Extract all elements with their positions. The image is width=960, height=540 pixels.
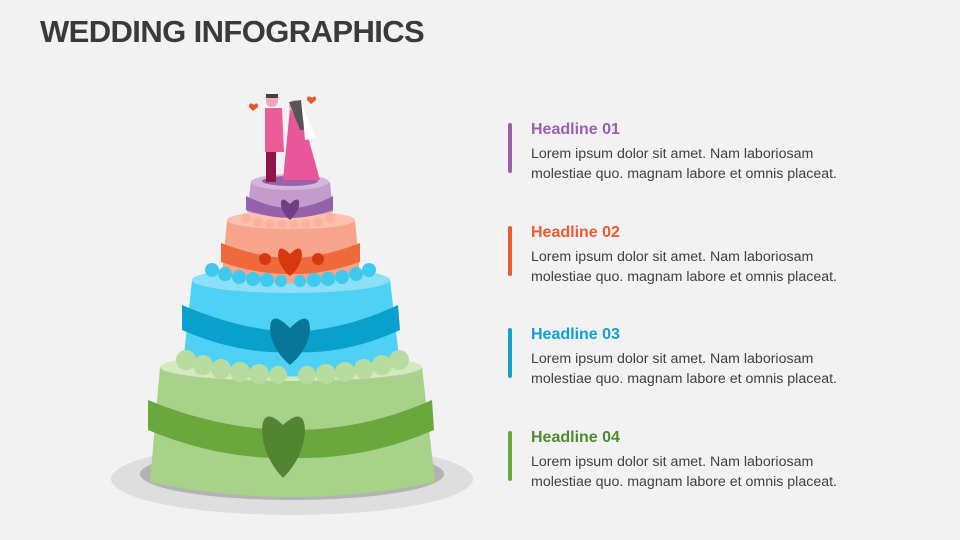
plate bbox=[111, 443, 473, 515]
item 02: Lorem ipsum dolor sit amet. Nam laboriosam bbox=[531, 249, 813, 265]
item 03: Lorem ipsum dolor sit amet. Nam laboriosam bbox=[531, 351, 813, 367]
tier 3 blue bbox=[182, 267, 400, 376]
item 04 bbox=[508, 429, 837, 490]
item 03: Headline 03 bbox=[531, 326, 620, 343]
item 01: molestiae quo. magnam labore et omnis placeat. bbox=[531, 166, 837, 182]
item 01 bbox=[508, 121, 837, 182]
item 01: Headline 01 bbox=[531, 121, 620, 138]
couple topper bbox=[249, 94, 320, 182]
bead borders bbox=[176, 213, 409, 384]
item 01: Lorem ipsum dolor sit amet. Nam laboriosam bbox=[531, 146, 813, 162]
item 04: Lorem ipsum dolor sit amet. Nam laboriosam bbox=[531, 454, 813, 470]
tier 1 purple bbox=[246, 174, 333, 220]
item 02: molestiae quo. magnam labore et omnis placeat. bbox=[531, 268, 837, 284]
item 03: molestiae quo. magnam labore et omnis placeat. bbox=[531, 370, 837, 386]
item 04: Headline 04 bbox=[531, 429, 620, 446]
item 02: Headline 02 bbox=[531, 224, 620, 241]
item 03 bbox=[508, 326, 837, 386]
item 04: molestiae quo. magnam labore et omnis placeat. bbox=[531, 474, 837, 490]
title: WEDDING INFOGRAPHICS bbox=[40, 14, 424, 49]
item 02 bbox=[508, 224, 837, 284]
tier 2 peach bbox=[221, 211, 360, 284]
tier 4 green bbox=[148, 353, 435, 497]
